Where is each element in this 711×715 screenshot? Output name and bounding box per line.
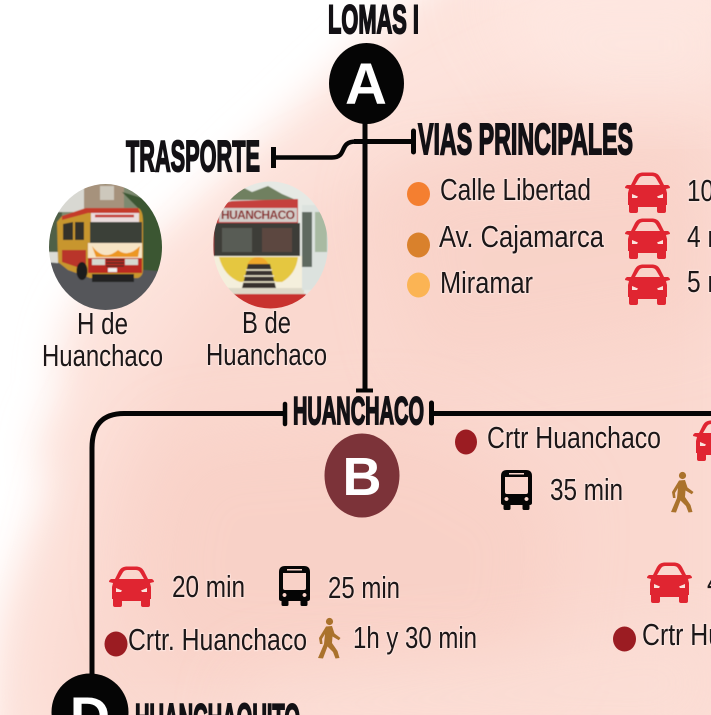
- route: Crtr Huanchaco, right: 35 min: [550, 472, 623, 507]
- road: Calle Libertad: Calle Libertad: [440, 172, 591, 207]
- route: Crtr. Huanchaco, left: 25 min: [328, 570, 400, 605]
- route: Crtr Huanchaco, right: [455, 420, 711, 512]
- route: Crtr. Huanchaco, left: Crtr. Huanchaco: [128, 622, 307, 657]
- label: H de Huanchaco: Huanchaco: [42, 338, 163, 373]
- road: Miramar: Miramar: [440, 265, 533, 300]
- route: Crtr. Huanchaco, left: 1h y 30 min: [353, 620, 477, 655]
- route: Crtr Huanchaco, far right: [613, 562, 711, 652]
- road: Calle Libertad: [407, 172, 711, 213]
- route: Crtr. Huanchaco, left: [104, 566, 477, 658]
- label: B de Huanchaco: B de: [242, 305, 291, 340]
- photo: bus H de Huanchaco: [49, 184, 162, 310]
- label: B de Huanchaco: Huanchaco: [206, 337, 327, 372]
- photo: bus B de Huanchaco: HUANCHACO: [221, 208, 295, 222]
- heading: Huanchaco: HUANCHACO: [293, 390, 424, 433]
- road: Av. Cajamarca: [407, 218, 711, 259]
- node A: [329, 43, 404, 124]
- text: TRASPORTE: [126, 132, 260, 181]
- label: H de Huanchaco: H de: [77, 306, 128, 341]
- road: Miramar: [407, 264, 711, 305]
- node B: B: [342, 447, 382, 507]
- road: Av. Cajamarca: Av. Cajamarca: [439, 219, 605, 254]
- route: Crtr. Huanchaco, left: 20 min: [172, 569, 245, 604]
- node A: A: [345, 52, 387, 117]
- connector lines: [92, 120, 711, 680]
- photo: bus B de Huanchaco: [213, 182, 328, 308]
- list: main roads: [407, 172, 711, 305]
- label: B de Huanchaco: [206, 305, 327, 372]
- route: Crtr Huanchaco, right: Crtr Huanchaco: [487, 420, 661, 455]
- node D: [52, 674, 128, 715]
- label: H de Huanchaco: [42, 306, 163, 373]
- node B: [324, 434, 400, 518]
